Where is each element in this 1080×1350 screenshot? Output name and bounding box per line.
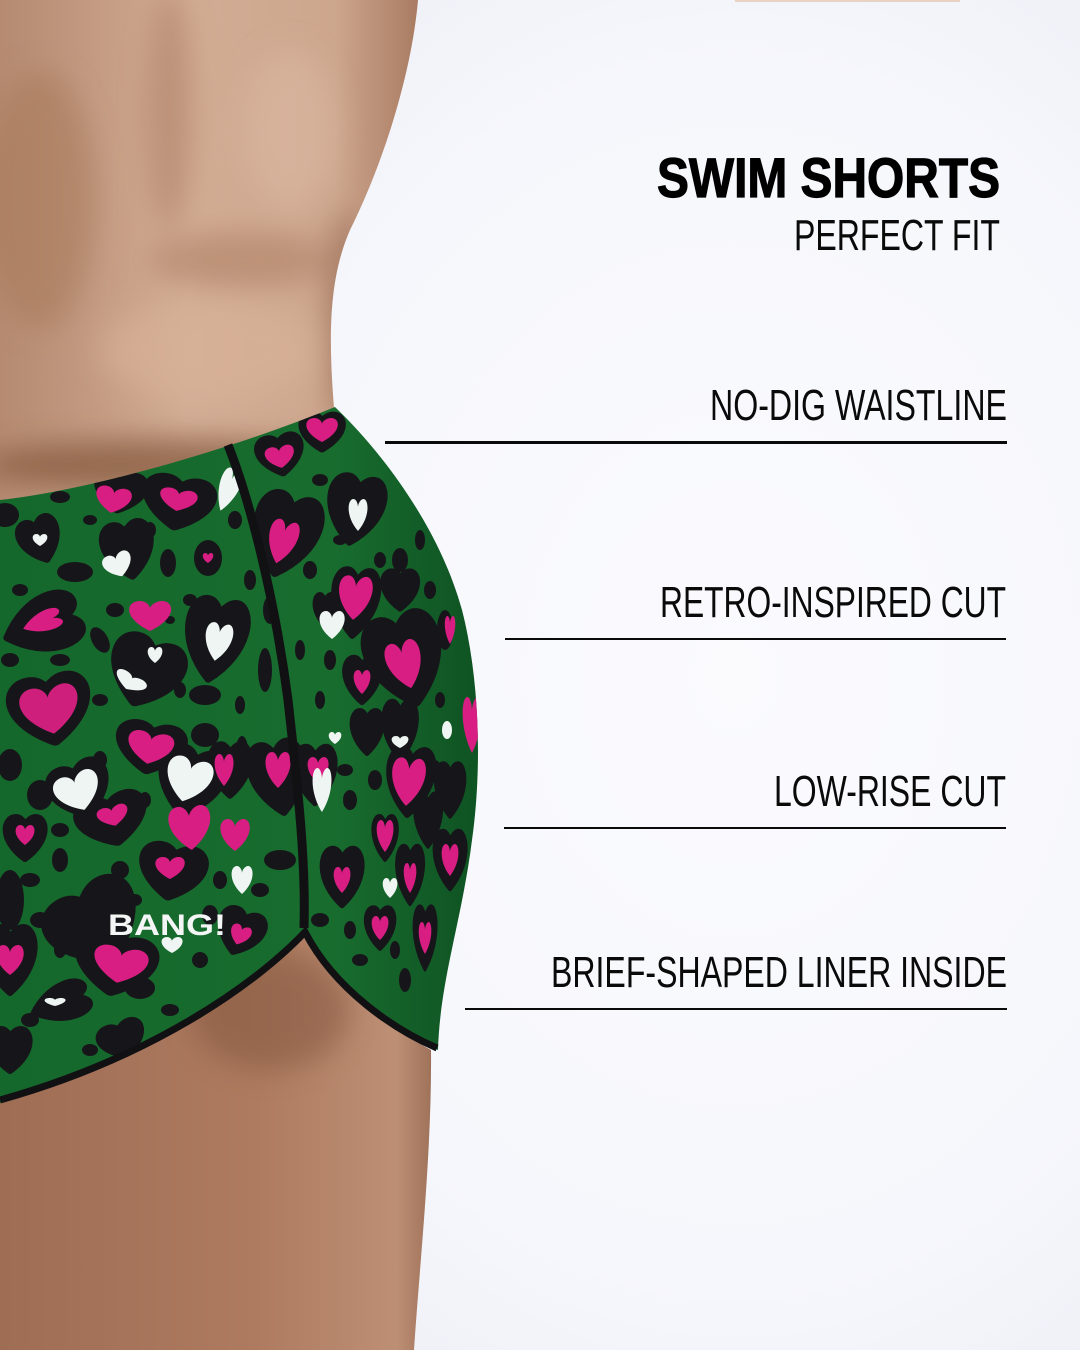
- photo: model torso: [0, 0, 418, 520]
- leopard spots: [0, 415, 482, 1070]
- pink centres: [0, 418, 482, 988]
- subtitle: PERFECT FIT: [794, 211, 1000, 260]
- small black dots: [0, 474, 453, 1056]
- white centres: [33, 466, 452, 1006]
- title: SWIM SHORTS: [657, 146, 1000, 209]
- photo: model thigh: [0, 920, 431, 1350]
- callout: no-dig waistline: [385, 381, 1007, 444]
- photo: small skin sliver at top edge: [735, 0, 960, 2]
- photo: leopard print swim shorts: [0, 407, 482, 1103]
- side piping stripe: [228, 445, 304, 928]
- hem binding: [0, 932, 437, 1100]
- logo: BANG!: BANG!: [108, 909, 226, 942]
